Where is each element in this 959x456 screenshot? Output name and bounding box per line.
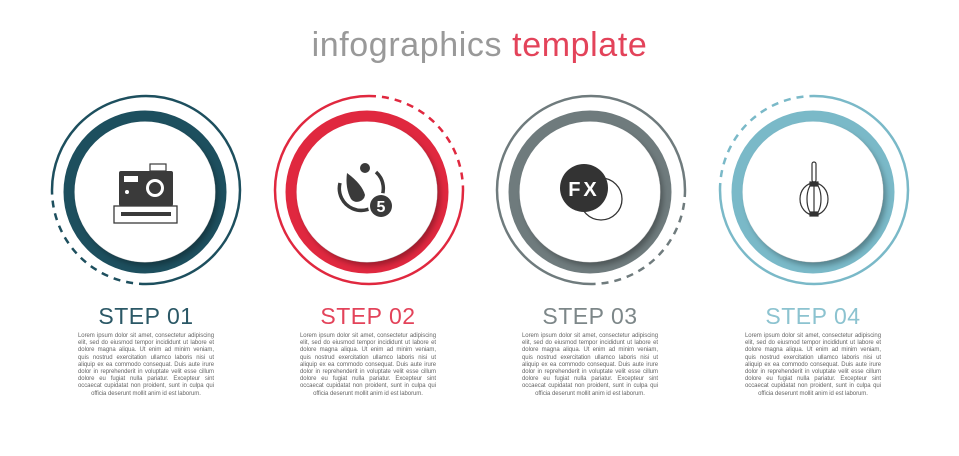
heading: step 03: STEP 03 [542,303,638,329]
circle: step 03 [497,96,685,284]
icon: camera [114,164,177,223]
text: step 01: Lorem ipsum dolor sit amet, consectetur adipiscing elit, sed do eiusmod tempor incididunt ut labore et dolore magna aliqua. Ut enim ad minim veniam, quis nostrud exercitation ullamco laboris nisi ut aliquip ex ea commodo consequat. Duis aute irure dolor in reprehenderit in voluptate velit esse cillum dolore eu fugiat nulla pariatur. Excepteur sint occaecat cupidatat non proident, sunt in culpa qui officia deserunt mollit anim id est laborum. [78,333,214,397]
icon: whisk [800,162,828,216]
title: infographics template [312,26,647,64]
circle: step 02 [275,96,463,284]
text: step 02: Lorem ipsum dolor sit amet, consectetur adipiscing elit, sed do eiusmod tempor incididunt ut labore et dolore magna aliqua. Ut enim ad minim veniam, quis nostrud exercitation ullamco laboris nisi ut aliquip ex ea commodo consequat. Duis aute irure dolor in reprehenderit in voluptate velit esse cillum dolore eu fugiat nulla pariatur. Excepteur sint occaecat cupidatat non proident, sunt in culpa qui officia deserunt mollit anim id est laborum. [300,333,436,397]
circle: step 01 [52,96,240,284]
heading: step 01: STEP 01 [98,303,194,329]
icon: FX [560,164,622,220]
icon: self-timer 5 [339,163,394,219]
icon: FX: FX [568,179,600,201]
icon: self-timer 5: 5 [377,199,386,216]
heading: step 02: STEP 02 [320,303,416,329]
circle: step 04 [720,96,908,284]
heading: step 04: STEP 04 [765,303,861,329]
text: step 04: Lorem ipsum dolor sit amet, consectetur adipiscing elit, sed do eiusmod tempor incididunt ut labore et dolore magna aliqua. Ut enim ad minim veniam, quis nostrud exercitation ullamco laboris nisi ut aliquip ex ea commodo consequat. Duis aute irure dolor in reprehenderit in voluptate velit esse cillum dolore eu fugiat nulla pariatur. Excepteur sint occaecat cupidatat non proident, sunt in culpa qui officia deserunt mollit anim id est laborum. [745,333,881,397]
text: step 03: Lorem ipsum dolor sit amet, consectetur adipiscing elit, sed do eiusmod tempor incididunt ut labore et dolore magna aliqua. Ut enim ad minim veniam, quis nostrud exercitation ullamco laboris nisi ut aliquip ex ea commodo consequat. Duis aute irure dolor in reprehenderit in voluptate velit esse cillum dolore eu fugiat nulla pariatur. Excepteur sint occaecat cupidatat non proident, sunt in culpa qui officia deserunt mollit anim id est laborum. [522,333,658,397]
